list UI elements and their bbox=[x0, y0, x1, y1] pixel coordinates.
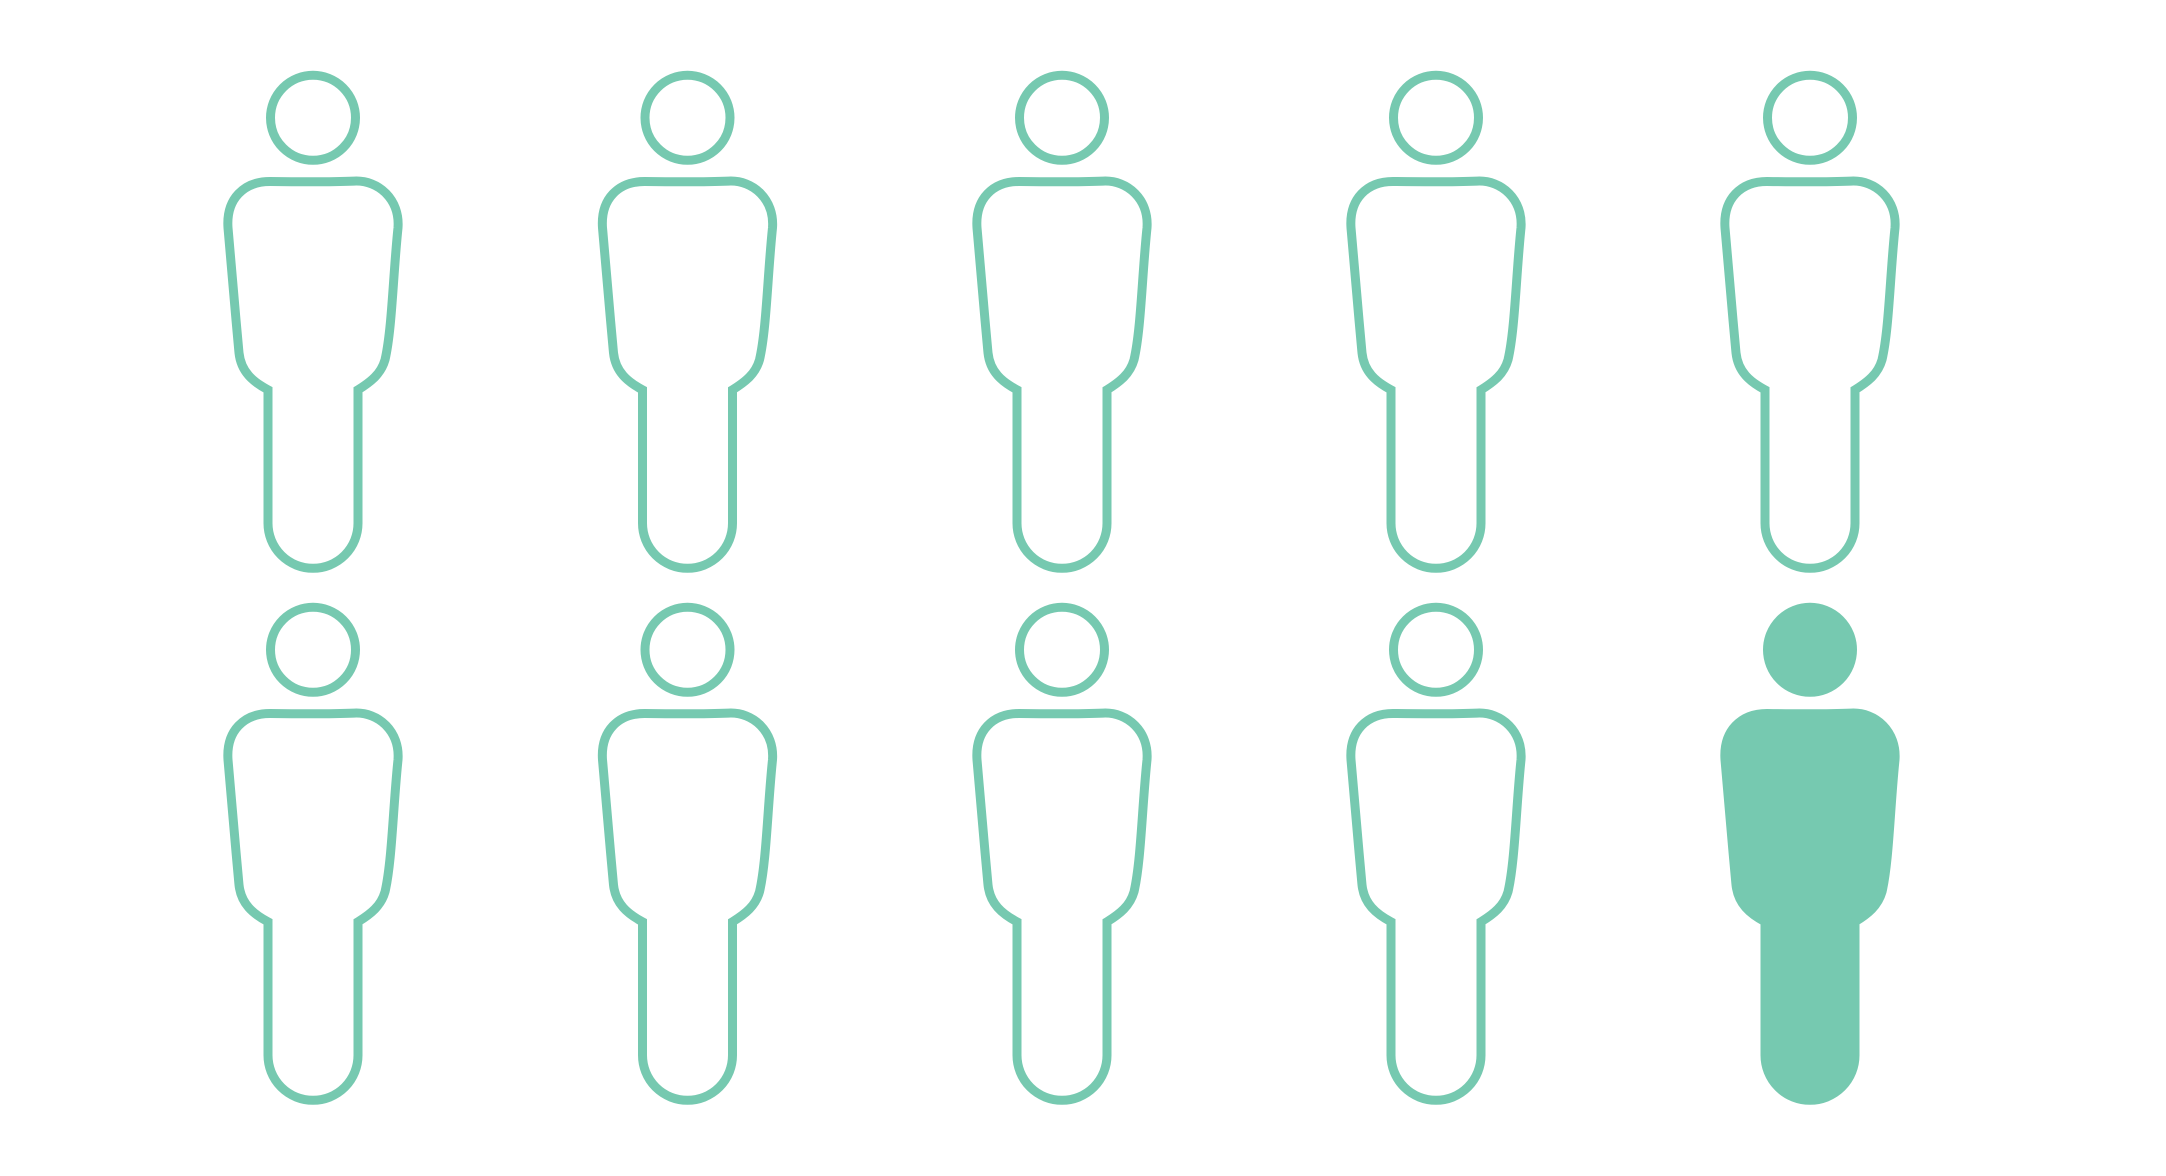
person 3: outline bbox=[977, 75, 1147, 568]
person 2: outline bbox=[602, 75, 773, 568]
person 8: outline bbox=[977, 607, 1147, 1100]
person 1: outline bbox=[228, 75, 398, 568]
person 10: filled highlight bbox=[1725, 607, 1895, 1100]
person 5: outline bbox=[1725, 75, 1895, 568]
person 4: outline bbox=[1351, 75, 1521, 568]
person 9: outline bbox=[1351, 607, 1521, 1100]
person 6: outline bbox=[228, 607, 398, 1100]
person 7: outline bbox=[602, 607, 773, 1100]
